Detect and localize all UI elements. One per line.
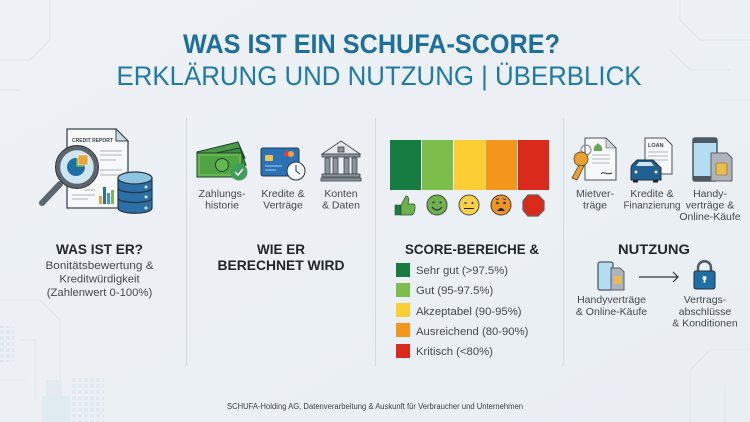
legend: score ranges: Akzeptabel (90-95%) <box>416 306 522 318</box>
heading: wie er berechnet wird: BERECHNET WIRD <box>218 257 344 273</box>
labels: uses: Online-Käufe <box>679 211 741 223</box>
chart: score colour bar <box>390 140 549 190</box>
icon: bank <box>321 141 361 181</box>
legend: score ranges: Gut (95-97.5%) <box>416 285 493 297</box>
legend: score ranges: Sehr gut (>97.5%) <box>416 265 508 277</box>
labels: uses: Mietver- <box>576 188 614 200</box>
heading: score-bereiche: SCORE-BEREICHE & <box>405 241 539 257</box>
text: phone contracts: Handyverträge <box>577 294 646 306</box>
text: contract conclusions: & Konditionen <box>672 318 738 330</box>
title <box>116 29 642 91</box>
labels: uses: Kredite & <box>630 188 674 200</box>
labels: uses: träge <box>583 200 607 212</box>
legend: score ranges: Kritisch (<80%) <box>416 346 493 358</box>
labels: calculation factors: Kredite & <box>261 188 305 200</box>
text: definition: (Zahlenwert 0-100%) <box>47 287 152 299</box>
panel: score-bereiche <box>390 140 549 358</box>
footer: SCHUFA-Holding AG, Datenverarbeitung & Auskunft für Verbraucher und Unternehmen <box>227 402 523 411</box>
heading: wie er berechnet wird: WIE ER <box>257 241 305 257</box>
icon: credit report with magnifier and database: CREDIT REPORT <box>72 138 114 144</box>
icon: credit card with clock <box>261 148 305 180</box>
title: ERKLÄRUNG UND NUTZUNG | ÜBERBLICK <box>116 61 642 91</box>
labels: calculation factors <box>199 188 360 212</box>
labels: uses: verträge & <box>686 200 734 212</box>
labels: calculation factors: Verträge <box>263 200 303 212</box>
text: contract conclusions: abschlüsse <box>679 306 731 318</box>
heading: wie er berechnet wird <box>218 241 344 273</box>
panel: nutzung <box>572 138 741 330</box>
icons: score faces <box>395 195 544 216</box>
icon: loan document with car: LOAN <box>648 143 664 149</box>
labels: calculation factors: historie <box>205 200 239 212</box>
legend: score ranges: Ausreichend (80-90%) <box>416 326 529 338</box>
heading: nutzung: NUTZUNG <box>618 241 690 257</box>
icon: padlock <box>694 261 715 289</box>
text: phone contracts: & Online-Käufe <box>576 306 647 318</box>
icon: loan document with car <box>631 138 672 182</box>
text: contract conclusions: Vertrags- <box>684 294 727 306</box>
labels: uses <box>576 188 741 223</box>
icon: rental contract with key <box>572 138 616 180</box>
labels: uses: Finanzierung <box>624 200 681 212</box>
labels: uses: Handy- <box>693 188 727 200</box>
text: phone contracts <box>576 294 647 318</box>
icon: phone and SIM small <box>598 262 624 290</box>
panel: wie er berechnet wird <box>197 141 361 273</box>
panel: was ist er <box>42 129 154 299</box>
arrow <box>639 272 678 282</box>
labels: calculation factors: Konten <box>324 188 358 200</box>
labels: calculation factors: & Daten <box>322 200 360 212</box>
text: definition: Kreditwürdigkeit <box>59 274 141 286</box>
icon: money with check <box>197 142 248 180</box>
labels: calculation factors: Zahlungs- <box>199 188 246 200</box>
title: WAS IST EIN SCHUFA-SCORE? <box>183 29 560 59</box>
icon: phone with SIM <box>693 138 732 181</box>
legend: score ranges <box>396 263 529 358</box>
icon: credit report with magnifier and database <box>42 129 152 213</box>
text: contract conclusions <box>672 294 738 330</box>
heading: was ist er: WAS IST ER? <box>56 241 143 257</box>
text: definition: Bonitätsbewertung & <box>46 260 154 272</box>
